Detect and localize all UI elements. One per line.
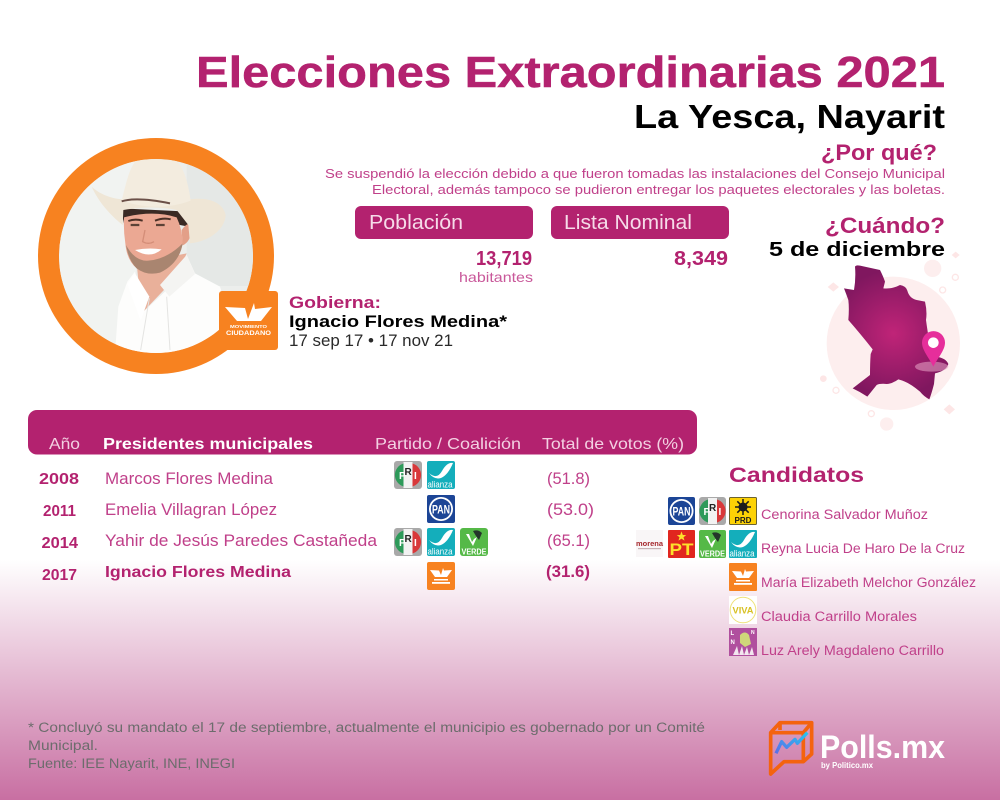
candidate 4: Claudia Carrillo Morales bbox=[761, 609, 917, 624]
icon: PRD bbox=[730, 498, 756, 525]
panel: población: 13,719 bbox=[476, 248, 532, 270]
table row 2011: Emelia Villagran López bbox=[105, 501, 277, 519]
smile bbox=[135, 248, 162, 255]
icon: PRI 2014: P bbox=[399, 538, 406, 549]
text block: gobierna: Ignacio Flores Medina* bbox=[289, 312, 507, 331]
table row 2011 bbox=[43, 500, 594, 520]
map: La Yesca with location pin bbox=[820, 252, 960, 431]
icon: Viva bbox=[729, 596, 757, 624]
icon: PRI 2014: R bbox=[404, 534, 412, 545]
icon: Verde 2014: VERDE bbox=[462, 548, 487, 556]
candidate 1 bbox=[668, 497, 928, 525]
logo: Polls.mx bbox=[771, 723, 945, 774]
table header bbox=[28, 410, 697, 454]
icon: Nueva Alianza 2014: alianza bbox=[428, 546, 453, 558]
icon: Levántate Nayarit: N bbox=[751, 630, 755, 636]
footnote and source bbox=[28, 720, 705, 771]
logo: Polls.mx: by Politico.mx bbox=[821, 761, 874, 770]
icon: Movimiento Ciudadano badge: CIUDADANO bbox=[226, 331, 271, 337]
panel: población bbox=[355, 206, 533, 285]
icon: Levántate Nayarit: L bbox=[730, 631, 734, 637]
table header: Presidentes municipales bbox=[103, 436, 313, 453]
footnote and source: * Concluyó su mandato el 17 de septiembre, actualmente el municipio es gobernado por un Comité bbox=[28, 720, 705, 735]
hat brim bbox=[92, 187, 226, 243]
table header: Partido / Coalición bbox=[375, 436, 521, 453]
panel: lista nominal: Lista Nominal bbox=[564, 212, 692, 234]
brows and eyes bbox=[128, 219, 171, 221]
hat crown bbox=[122, 159, 191, 207]
footnote and source: Municipal. bbox=[28, 738, 98, 753]
icon: Movimiento Ciudadano badge: MOVIMIENTO bbox=[230, 324, 268, 329]
icon: Movimiento Ciudadano 2017 bbox=[427, 562, 455, 590]
panel: cuándo: 5 de diciembre bbox=[769, 238, 945, 261]
heading: candidatos: Candidatos bbox=[729, 464, 864, 487]
logo: Polls.mx: Polls.mx bbox=[820, 729, 945, 765]
panel: población: habitantes bbox=[459, 269, 533, 285]
candidate 5: Luz Arely Magdaleno Carrillo bbox=[761, 643, 944, 658]
table row 2008: (51.8) bbox=[547, 469, 590, 488]
icon: Movimiento Ciudadano bbox=[729, 563, 757, 591]
candidate 3 bbox=[729, 563, 976, 591]
table header: Total de votos (%) bbox=[542, 436, 684, 453]
footnote and source: Fuente: IEE Nayarit, INE, INEGI bbox=[28, 756, 235, 771]
panel: cuándo bbox=[769, 213, 945, 261]
icon: Movimiento Ciudadano badge bbox=[219, 291, 278, 350]
text block: gobierna bbox=[289, 293, 507, 350]
icon: PRI: R bbox=[709, 503, 717, 514]
icon: PRI: I bbox=[718, 507, 722, 518]
hair bbox=[121, 208, 188, 227]
icon: Nueva Alianza 2014 bbox=[427, 528, 455, 558]
icon: Morena bbox=[636, 530, 664, 557]
face bbox=[124, 214, 183, 274]
icon: PRI 2008: I bbox=[414, 471, 417, 482]
table header: Año bbox=[49, 436, 80, 453]
candidate 2 bbox=[636, 530, 965, 560]
neck bbox=[137, 253, 187, 313]
beard bbox=[126, 243, 183, 274]
panel: lista nominal bbox=[551, 206, 729, 270]
table row 2014: 2014 bbox=[42, 535, 78, 552]
heading: por qué: ¿Por qué? bbox=[821, 140, 937, 165]
table row 2014: Yahir de Jesús Paredes Castañeda bbox=[105, 532, 378, 550]
text block: gobierna: Gobierna: bbox=[289, 293, 381, 312]
table row 2011: 2011 bbox=[43, 503, 76, 520]
icon: Verde bbox=[699, 530, 726, 558]
text block: gobierna: 17 sep 17 • 17 nov 21 bbox=[289, 331, 453, 350]
icon: PAN bbox=[668, 497, 695, 525]
table row 2008: Marcos Flores Medina bbox=[105, 470, 274, 488]
icon: Nueva Alianza bbox=[729, 530, 757, 560]
icon: Nueva Alianza 2008: alianza bbox=[428, 480, 453, 490]
candidate 1: Cenorina Salvador Muñoz bbox=[761, 507, 928, 522]
table row 2017: (31.6) bbox=[546, 562, 590, 581]
table row 2017: 2017 bbox=[42, 567, 77, 584]
photo: portrait in orange ring bbox=[38, 138, 274, 374]
table row 2017: Ignacio Flores Medina bbox=[105, 564, 291, 581]
candidate 4 bbox=[729, 596, 917, 624]
subtitle: La Yesca, Nayarit bbox=[634, 98, 945, 135]
title: Elecciones Extraordinarias 2021 bbox=[196, 48, 945, 97]
table row 2008: 2008 bbox=[39, 471, 79, 488]
candidate 5 bbox=[729, 628, 944, 658]
icon: PAN: PAN bbox=[672, 504, 690, 518]
icon: PRI 2014 bbox=[394, 528, 422, 556]
icon: PT bbox=[668, 530, 695, 559]
icon: Nueva Alianza 2008 bbox=[427, 461, 455, 490]
icon: Levántate Nayarit bbox=[729, 628, 757, 656]
text block: explanation: Se suspendió la elección debido a que fueron tomadas las instalaciones del Consejo Municipal bbox=[325, 166, 945, 181]
icon: Verde: VERDE bbox=[700, 550, 726, 558]
text block: explanation bbox=[325, 166, 945, 197]
table row 2014: (65.1) bbox=[547, 531, 590, 550]
table row 2008 bbox=[39, 469, 590, 488]
icon: PRI bbox=[699, 497, 726, 525]
nose bbox=[143, 230, 154, 243]
table row 2011: (53.0) bbox=[547, 500, 594, 519]
panel: cuándo: ¿Cuándo? bbox=[825, 213, 945, 238]
icon: Verde 2014 bbox=[460, 528, 488, 556]
icon: Nueva Alianza: alianza bbox=[730, 548, 755, 560]
icon: PRD: PRD bbox=[734, 516, 752, 525]
panel: población: Población bbox=[369, 212, 463, 234]
icon: Morena: morena bbox=[636, 539, 664, 548]
icon: PT: PT bbox=[670, 540, 694, 559]
ear bbox=[182, 224, 190, 246]
shirt bbox=[116, 263, 221, 353]
candidate 3: María Elizabeth Melchor González bbox=[761, 575, 976, 590]
text block: explanation: Electoral, además tampoco se pudieron entregar los paquetes electorales y las boletas. bbox=[372, 182, 945, 197]
icon: Viva: VIVA bbox=[732, 606, 754, 616]
icon: Levántate Nayarit: N bbox=[730, 640, 735, 646]
icon: PRI 2008 bbox=[394, 461, 422, 489]
icon: PAN 2011: PAN bbox=[432, 502, 450, 516]
candidate 2: Reyna Lucia De Haro De la Cruz bbox=[761, 541, 965, 556]
icon: PAN 2011 bbox=[427, 495, 455, 523]
table row 2014 bbox=[42, 531, 590, 552]
icon: PRI 2008: P bbox=[399, 471, 406, 482]
panel: lista nominal: 8,349 bbox=[674, 248, 728, 270]
table row 2017 bbox=[42, 562, 590, 584]
icon: PRI 2008: R bbox=[404, 467, 412, 478]
icon: PRI: P bbox=[704, 507, 710, 518]
icon: PRI 2014: I bbox=[414, 538, 417, 549]
